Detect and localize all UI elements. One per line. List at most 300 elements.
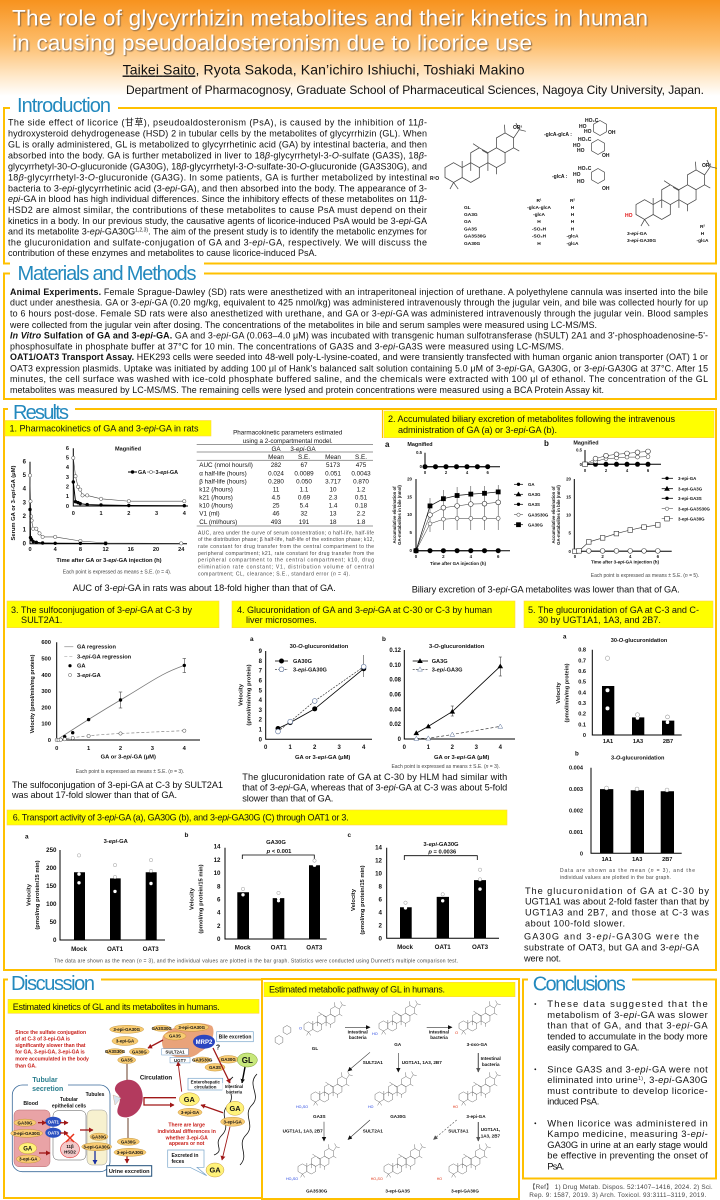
- finding text: [523, 886, 709, 963]
- structures: third row: HO₃SO: [286, 1177, 298, 1181]
- introduction text: hydroxysteroid dehydrogenease (HSD) 2 in tubular cells by the metabolites of glycyrrhizin (GL). When: [8, 129, 427, 139]
- chart legend: GA: [138, 470, 146, 476]
- diagram: GL, intestine and enterohepatic loop: GA30G: [221, 1057, 236, 1062]
- introduction text: [8, 116, 427, 258]
- chart b: 3-epi-GA biliary excretion: Accumulative elimination of: [551, 486, 556, 544]
- methods text: OAT3 expression plasmids. Uptake was initiated by adding 100 μl of Hank’s balanced salt solution containing 5.0 μM of 3-epi-GA, GA30G, or 3-epi-GA30G at 37°C. After 15: [10, 363, 708, 373]
- diagram: urine excretion: [107, 1118, 152, 1176]
- diagram: tubular secretion inset: HSD2: [64, 1149, 76, 1154]
- affiliation: Department of Pharmacognosy, Graduate School of Pharmaceutical Sciences, Nagoya City University, Japan.: [126, 83, 704, 97]
- title: [12, 6, 648, 56]
- introduction text: contribution of these enzymes and metabolites to cause licorice-induced PsA.: [8, 248, 317, 258]
- pathway arrows and enzyme labels: UGT1A1, 1A3, 2B7: [283, 1128, 323, 1134]
- bar chart a: 30-O-glucuronidation: a: [563, 634, 567, 640]
- panel 4 heading: [232, 601, 515, 628]
- diagram: metabolites above kidney: GA30G: [132, 1049, 147, 1054]
- structures: first row: HO: [372, 1032, 378, 1036]
- chemical structures of GL and metabolites: R²: [570, 198, 575, 204]
- panel 1 heading: [5, 420, 211, 436]
- chart a: GA biliary excretion: 0: [410, 548, 413, 553]
- chart b legend: [662, 476, 711, 521]
- chart b: 3-epi-GA biliary excretion: 0: [584, 468, 587, 473]
- line chart: serum concentration: 5: [23, 473, 27, 479]
- finding text: AUC of 3-epi-GA in rats was about 18-fold higher than that of GA.: [73, 583, 336, 593]
- bar chart a: 3-epi-GA: 250: [46, 847, 57, 854]
- chemical structures of GL and metabolites: HO: [577, 179, 585, 185]
- methods text: OAT1/OAT3 Transport Assay. HEK293 cells were seeded into 48-well poly-L-lysine-coated, and were transiently transfected with human organic anion transporter (OAT) 1 or: [10, 352, 708, 362]
- pharmacokinetic parameter table: 1.2: [357, 486, 366, 494]
- diagram: GL, intestine and enterohepatic loop: 3-epi-GA: [224, 1119, 243, 1124]
- methods text: metabolites was measured by LC-MS/MS. The remaining cells were lysed and protein concentrations were measured using a BCA Protein Assay kit.: [10, 385, 604, 395]
- chemical structures of GL and metabolites: OH: [608, 130, 616, 136]
- panel 1 heading: 1. Pharmacokinetics of GA and 3-epi-GA in rats: [10, 424, 199, 434]
- panel 4: glucuronidation by HLM: [232, 601, 515, 804]
- diagram: liver: [148, 1023, 220, 1063]
- line chart: serum concentration: 0: [23, 542, 27, 548]
- chart a: GA biliary excretion: 15: [407, 494, 413, 499]
- pharmacokinetic parameter table: Mean: [325, 454, 341, 461]
- statistics note: The data are shown as the mean (n = 3), and the individual values are plotted in the bar graph. Statistics were conducted using Dunnett's multiple comparison test.: [54, 958, 458, 964]
- chemical structures of GL and metabolites: R¹: [536, 198, 542, 204]
- diagram: tubular secretion inset: [11, 1074, 112, 1172]
- bar chart a: 3-epi-GA: a: [25, 834, 29, 840]
- pharmacokinetic parameter table: 475: [356, 462, 367, 469]
- pathway arrows and enzyme labels: UGT1A1, 1A3, 2B7: [402, 1060, 442, 1065]
- references: [529, 1184, 713, 1199]
- pharmacokinetic parameter table: 0.050: [296, 478, 312, 486]
- bar chart a: 3-epi-GA: 0: [53, 937, 57, 944]
- chemical structures of GL and metabolites: H: [571, 212, 575, 218]
- structures: second row: HO: [453, 1105, 458, 1109]
- bar chart a: 30-O-glucuronidation: 30-O-glucuronidation: [611, 638, 668, 644]
- pharmacokinetic parameter table: 25: [272, 502, 280, 510]
- conclusion bullet 2: epi-GA30G: [658, 1074, 708, 1085]
- chemical structures of GL and metabolites: OH: [602, 153, 610, 159]
- chart b: 3-O-glucuronidation: [382, 636, 515, 761]
- explanatory red text: more accumulated in the body: [15, 1057, 89, 1063]
- bar chart b: 3-O-glucuronidation: 2B7: [662, 857, 672, 863]
- chart legend: 3-epi-GA: [156, 470, 178, 476]
- callout: excreted in feces: feces: [172, 1159, 185, 1165]
- chemical structures of GL and metabolites: HO: [584, 129, 592, 135]
- pathway arrows and enzyme labels: SULT3A1: [448, 1128, 469, 1134]
- inset chart: magnified: 3: [66, 475, 69, 481]
- chart b: 3-epi-GA biliary excretion: [544, 439, 711, 564]
- bar chart b: GA30G: 6: [217, 896, 221, 904]
- line chart: sulfoconjugation velocity: 2: [119, 746, 122, 752]
- bar chart a: 30-O-glucuronidation: 0: [583, 733, 586, 739]
- chart b: 3-epi-GA biliary excretion: GA-metabolites in bile (nmol): [556, 485, 561, 545]
- chemical structures of GL and metabolites: GA3S: [464, 226, 478, 232]
- inset chart: magnified: 4: [183, 511, 187, 517]
- pharmacokinetic parameter table: CL (ml/hours): [199, 519, 237, 526]
- introduction text: 18β-glycyrrhetyl-3-O-glucuronide (GA3G). In some patients, GA is further metabolized by intestinal: [8, 172, 427, 182]
- line chart: sulfoconjugation velocity: 500: [41, 656, 51, 662]
- bar chart a: 30-O-glucuronidation: 2B7: [663, 739, 673, 745]
- line chart: serum concentration: 16: [128, 547, 134, 553]
- chart a legend: [275, 659, 327, 673]
- chart b legend: GA3G: [432, 659, 448, 665]
- bar chart c: 3-epi-GA30G: 3-epi-GA30G: [423, 842, 459, 848]
- introduction text: GL is orally administered, GL is metabolized to glycyrrhetinic acid (GA) by intestinal bacteria, and then: [8, 140, 427, 150]
- chart a: 30-O-glucuronidation: 6: [259, 678, 263, 684]
- chart a: GA biliary excretion: 6: [487, 470, 490, 475]
- line chart: serum concentration: [11, 460, 187, 564]
- pharmacokinetic parameter table: 11: [273, 486, 280, 494]
- chemical structures of GL and metabolites: H: [537, 219, 541, 225]
- chart b: 3-O-glucuronidation: 0: [398, 737, 402, 743]
- line chart: sulfoconjugation velocity: [30, 640, 200, 761]
- conclusion bullet 1: tended to accumulate in the body more: [547, 1031, 708, 1042]
- pharmacokinetic parameter table: 2.2: [357, 510, 366, 518]
- conclusion bullet 1: easily compared to GA.: [547, 1041, 639, 1052]
- introduction text: and its metabolite 3-epi-GA30G: [8, 227, 135, 237]
- bar chart a: 3-epi-GA: Velocity: [27, 883, 33, 906]
- bar chart c: 3-epi-GA30G: 2: [379, 922, 383, 929]
- table footnote: elimination rate constant; V1, distribution volume of central: [198, 565, 374, 571]
- panel: metabolic pathway: [262, 979, 519, 1199]
- structures: first row: 3-oxo-GA: [467, 1042, 488, 1047]
- diagram: tubular secretion inset: Tubular: [32, 1077, 58, 1084]
- table footnote: [198, 530, 374, 577]
- diagram: tubular secretion inset: Tubular: [60, 1097, 78, 1103]
- chemical structures of GL and metabolites: [430, 118, 717, 247]
- bar chart b: GA30G: (pmol/mg protein/15 min): [198, 864, 204, 934]
- bar chart a: 30-O-glucuronidation: 0.4: [578, 690, 587, 696]
- diagram: tubular secretion inset: epithelial cells: [52, 1104, 86, 1110]
- finding text: [242, 772, 507, 804]
- pharmacokinetic parameter table: 0.0043: [351, 470, 371, 477]
- chart legend: GA regression: [77, 645, 117, 651]
- pharmacokinetic parameter table: 10: [329, 486, 337, 494]
- bar chart b: 3-O-glucuronidation: 0: [580, 851, 583, 857]
- bar chart a: 30-O-glucuronidation: (pmol/min/mg protein): [564, 663, 570, 723]
- pathway subheading: Estimated metabolic pathway of GL in humans.: [269, 984, 445, 994]
- conclusion bullet 2: must contribute to develop licorice-: [547, 1085, 708, 1096]
- title: in causing pseudoaldosteronism due to licorice use: [12, 30, 532, 56]
- methods text: were collected from the jugular vein after dosing. The concentrations of the metabolites in bile and serum samples were measured using LC-MS/MS.: [9, 320, 597, 330]
- chemical structures of GL and metabolites: H: [571, 205, 575, 211]
- bar chart c: 3-epi-GA30G: c: [348, 832, 352, 839]
- bar chart a: 30-O-glucuronidation: 1A1: [603, 739, 613, 745]
- pharmacokinetic parameter table: 1.4: [329, 502, 338, 510]
- bar chart a: 3-epi-GA: 200: [46, 865, 57, 872]
- heading: discussion: Discussion: [11, 973, 95, 995]
- chart a legend: GA3S30G: [528, 512, 549, 518]
- pharmacokinetic parameter table: 5173: [326, 462, 340, 469]
- bar chart a: 30-O-glucuronidation: 1A3: [633, 739, 643, 745]
- label: circulation: Circulation: [140, 1074, 172, 1082]
- chemical structures of GL and metabolites: HO: [573, 143, 581, 149]
- chart a: GA biliary excretion: Time after GA injection (h): [430, 561, 486, 566]
- bar chart a: 3-epi-GA: (pmol/mg protein/15 min): [35, 860, 41, 930]
- diagram: tubular secretion inset: OAT1: [48, 1119, 60, 1124]
- inset chart: magnified: 1: [99, 511, 103, 517]
- bar chart b: GA30G: 12: [214, 857, 221, 864]
- diagram: tubular secretion inset: Blood: [23, 1101, 38, 1107]
- bar chart a: 3-epi-GA: OAT1: [107, 946, 124, 953]
- explanatory red text: for GA, 3-epi-GA, 3-epi-GA is: [15, 1050, 85, 1056]
- conclusion bullet 3: GA30G in urine at an early stage would: [547, 1139, 708, 1150]
- panel 3 heading: 3. The sulfoconjugation of 3-epi-GA at C-3 by: [11, 605, 192, 615]
- title: The role of glycyrrhizin metabolites and their kinetics in human: [12, 6, 648, 30]
- chart legend: GA: [77, 664, 86, 670]
- chart a: GA biliary excretion: [385, 440, 549, 566]
- diagram: liver: 3-epi-GA30G: [178, 1025, 206, 1030]
- diagram: liver: SULT2A1: [165, 1050, 185, 1055]
- finding text: substrate of OAT3, but GA and 3-epi-GA: [524, 943, 700, 953]
- diagram: metabolites above kidney: GA3S: [121, 1058, 133, 1063]
- pathway arrows and enzyme labels: SULT2A1: [363, 1128, 383, 1134]
- individual differences red text: There are large: [168, 1123, 205, 1129]
- chemical structures of GL and metabolites: -glcA: [566, 234, 579, 240]
- chart a: 30-O-glucuronidation: 0: [264, 745, 268, 751]
- pathway arrows and enzyme labels: Intestinal: [481, 1056, 501, 1061]
- line chart: serum concentration: 12: [102, 547, 109, 553]
- chart a: GA biliary excretion: 0: [420, 464, 423, 469]
- inset chart: magnified: 0: [66, 504, 69, 510]
- bar chart a: 30-O-glucuronidation: Velocity: [556, 682, 562, 704]
- bar chart c: 3-epi-GA30G: Velocity: [351, 888, 357, 911]
- conclusion bullet 2: [534, 1063, 708, 1107]
- chart a: 30-O-glucuronidation: 2: [313, 745, 317, 751]
- bar chart a: 3-epi-GA: Mock: [71, 946, 87, 953]
- bar chart a: 3-epi-GA: 3-epi-GA: [104, 839, 129, 845]
- chart b: 3-epi-GA biliary excretion: 2: [601, 554, 604, 559]
- chart legend: 3-epi-GA regression: [77, 654, 132, 660]
- chart b: 3-epi-GA biliary excretion: 20: [566, 476, 572, 482]
- individual differences red text: individual differences in: [158, 1129, 216, 1135]
- inset chart: magnified: 6: [66, 446, 69, 452]
- chart a: GA biliary excretion: 2: [445, 470, 448, 475]
- references: 【Ref】 1) Drug Metab. Dispos. 52:1407–1416, 2024. 2) Sci.: [529, 1184, 713, 1191]
- pharmacokinetic parameter table: 3-epi-GA: [290, 446, 316, 453]
- panel: conclusions: [523, 974, 716, 1178]
- diagram: metabolites above kidney: GA3S30G: [105, 1049, 126, 1054]
- finding text: was about 17-fold slower than that of GA.: [11, 790, 177, 800]
- data note: individual values are plotted in the bar graph.: [560, 875, 671, 881]
- kinetics subheading: Estimated kinetics of GL and its metabolites in humans.: [13, 1002, 220, 1012]
- line chart: serum concentration: Serum GA or 3-epi-GA (μM): [11, 465, 17, 540]
- chart a legend: GA3G: [528, 492, 541, 497]
- table footnote: of the distribution phase; β half-life, half-life of the extinction phase; k12,: [198, 537, 374, 543]
- bar chart c: 3-epi-GA30G: 0: [379, 935, 383, 942]
- pathway arrows and enzyme labels: bacteria: [349, 1035, 367, 1040]
- structures: first row: GL: [312, 1046, 318, 1051]
- chemical structures of GL and metabolites: -glcA: [533, 212, 546, 218]
- bar chart b: GA30G: 2: [217, 923, 221, 930]
- chart b: 3-epi-GA biliary excretion: b: [544, 439, 549, 448]
- chart b: 3-epi-GA biliary excretion: Magnified: [573, 440, 599, 446]
- diagram: metabolites above kidney: 3-epi-GA30G: [113, 1027, 141, 1032]
- chemical structures of GL and metabolites: -SO₃H: [532, 226, 547, 232]
- line chart: sulfoconjugation velocity: 200: [41, 705, 51, 711]
- methods text: In Vitro Sulfation of GA and 3-epi-GA. GA and 3-epi-GA (0.063–4.0 μM) was incubated with transgenic human sulfotransferase (hSULT) 2A1 and 3'-phosphoadenosine-5'-: [10, 331, 708, 341]
- line chart: sulfoconjugation velocity: 0: [48, 738, 51, 744]
- diagram: liver: ?: [216, 1044, 220, 1052]
- chart a: 30-O-glucuronidation: GA or 3-epi-GA (μM): [295, 755, 350, 761]
- chart b legend: 3-epi-GA: [678, 476, 697, 481]
- pharmacokinetic parameter table: 67: [300, 462, 308, 469]
- line chart: sulfoconjugation velocity: 3: [151, 746, 155, 752]
- methods text: [9, 287, 709, 395]
- bar chart b: GA30G: 8: [217, 883, 221, 890]
- chart a: GA biliary excretion: 0.5: [416, 450, 423, 455]
- finding text: The glucuronidation rate of GA at C-30 by HLM had similar with: [242, 772, 507, 782]
- chart b: 3-epi-GA biliary excretion: 6: [657, 554, 660, 559]
- chart b: 3-O-glucuronidation: 0.02: [389, 722, 402, 728]
- chart b: 3-O-glucuronidation: 4: [499, 745, 503, 751]
- diagram: metabolites above kidney: [105, 1025, 149, 1080]
- pharmacokinetic parameter table: 282: [271, 462, 282, 469]
- inset chart: magnified: 0: [72, 511, 75, 517]
- pharmacokinetic parameter table: 0.870: [353, 478, 369, 486]
- diagram: GL, intestine and enterohepatic loop: 3-epi-GA: [181, 1110, 200, 1115]
- bar chart b: GA30G: OAT1: [271, 944, 287, 952]
- explanatory red text: of at C-3 of 3-epi-GA is: [15, 1036, 70, 1042]
- chart a: GA biliary excretion: GA-metabolites in bile (nmol): [397, 485, 402, 545]
- inset chart: magnified: 5: [66, 456, 69, 462]
- panel 6 heading: 6. Transport activity of 3-epi-GA (a), GA30G (b), and 3-epi-GA30G (C) through OAT1 or 3.: [13, 813, 349, 823]
- panel: results: [4, 402, 716, 970]
- chart b: 3-epi-GA biliary excretion: 10: [566, 513, 572, 518]
- chemical structures of GL and metabolites: HO: [625, 213, 633, 219]
- pathway subheading: [264, 982, 515, 997]
- conclusion bullet 3: [534, 1117, 708, 1172]
- line chart: sulfoconjugation velocity: 1: [87, 746, 91, 752]
- pharmacokinetic parameter table: k10 (/hours): [199, 502, 233, 510]
- line chart: sulfoconjugation velocity: 0: [55, 746, 58, 752]
- bar chart a: 3-epi-GA: 50: [50, 919, 57, 926]
- bar chart b: 3-O-glucuronidation: 0.001: [569, 830, 583, 836]
- chart b: 3-O-glucuronidation: 0.06: [389, 692, 402, 698]
- chart a: 30-O-glucuronidation: 2: [259, 718, 263, 724]
- pharmacokinetic parameter table: 5.4: [300, 502, 309, 510]
- bar chart a: 30-O-glucuronidation: 0.6: [578, 669, 586, 675]
- pharmacokinetic parameter table: Mean: [268, 454, 284, 461]
- bar chart a: 3-epi-GA: [25, 834, 165, 953]
- bar chart c: 3-epi-GA30G: 14: [375, 845, 383, 852]
- pharmacokinetic parameter table: GA: [271, 446, 281, 453]
- line chart: serum concentration: 4: [23, 487, 27, 493]
- diagram: GL, intestine and enterohepatic loop: GL: [242, 1056, 253, 1065]
- pharmacokinetic parameter table: V1 (ml): [199, 510, 220, 518]
- diagram: tubular secretion inset: 3-epi-GA: [19, 1157, 38, 1162]
- bar chart b: 3-O-glucuronidation: 1A3: [632, 857, 642, 863]
- diagram: tubular secretion inset: GA30G: [92, 1134, 107, 1139]
- chart a: GA biliary excretion: Accumulative elimination of: [392, 486, 397, 544]
- chart a: 30-O-glucuronidation: 9: [259, 649, 263, 655]
- chart a legend: GA3S: [528, 502, 540, 507]
- inset chart: magnified: 1: [66, 494, 69, 500]
- structures: second row: HO: [368, 1105, 374, 1109]
- bar chart c: 3-epi-GA30G: (pmol/mg protein/15 min): [360, 865, 366, 935]
- line chart: serum concentration: 24: [178, 547, 185, 553]
- diagram: tubular secretion inset: 3-epi-GA30G: [83, 1144, 111, 1149]
- panel 2 heading: [384, 411, 714, 438]
- structures: third row: HO₃SO: [371, 1177, 383, 1181]
- finding text: UGT1A3 and 2B7, and those at C-3 was: [525, 908, 709, 918]
- chart a legend: GA30G: [528, 522, 543, 528]
- explanatory red text: [15, 1030, 89, 1069]
- panel 2 heading: 2. Accumulated biliary excretion of metabolites following the intravenous: [388, 414, 675, 424]
- diagram: GL, intestine and enterohepatic loop: Enterohepatic: [191, 1079, 220, 1084]
- panel: materials and methods: [4, 262, 716, 399]
- bar chart a: 3-epi-GA: OAT3: [143, 946, 159, 953]
- table footnote: peripheral compartment to the central compartment; k10, drug: [198, 558, 374, 564]
- callout: excreted in feces: GA: [209, 1166, 221, 1175]
- chemical structures of GL and metabolites: 3-epi-GA30G: [627, 238, 656, 244]
- diagram: urine excretion: GA30G: [121, 1139, 136, 1144]
- chart b: 3-epi-GA biliary excretion: 4: [626, 468, 629, 473]
- conclusion bullet 1: These data suggested that the: [547, 998, 708, 1009]
- conclusion bullet 1: [534, 998, 708, 1052]
- bar chart b: GA30G: p < 0.001: [266, 849, 292, 855]
- line chart: serum concentration: 2: [23, 514, 27, 520]
- structures: third row: HO: [437, 1177, 442, 1181]
- conclusion bullet 3: PsA.: [547, 1161, 564, 1172]
- chart a: 30-O-glucuronidation: 4: [259, 698, 263, 704]
- line chart: sulfoconjugation velocity: GA or 3-epi-GA (μM): [101, 755, 156, 761]
- line chart: sulfoconjugation velocity: Velocity (pmol/min/mg protein): [30, 654, 36, 733]
- pharmacokinetic parameter table: k12 (/hours): [199, 486, 233, 494]
- pharmacokinetic parameter table: 3.717: [325, 478, 341, 486]
- inset chart: magnified: Magnified: [115, 446, 142, 452]
- panel: introduction: [4, 95, 717, 264]
- chemical structures of GL and metabolites: HO: [579, 124, 587, 130]
- chart b: 3-O-glucuronidation: 2: [451, 745, 455, 751]
- note: error expression: Each point is expressed as means ± S.E. (n = 3).: [391, 764, 500, 770]
- header background gradient: [0, 0, 720, 96]
- bar chart a: 30-O-glucuronidation: 0.3: [578, 701, 586, 707]
- chart a: 30-O-glucuronidation: (pmol/min/mg protein): [247, 664, 253, 726]
- line chart: serum concentration: 8: [79, 547, 82, 553]
- chart b: 3-epi-GA biliary excretion: 4: [629, 554, 632, 559]
- panel: discussion: [4, 973, 262, 1198]
- authors: Taikei Saito, Ryota Sakoda, Kan’ichiro Ishiuchi, Toshiaki Makino: [123, 62, 525, 78]
- bar chart b: GA30G: 10: [214, 870, 221, 877]
- introduction text: 1,2,3): [135, 228, 148, 234]
- bar chart a: 3-epi-GA: 150: [46, 883, 57, 890]
- data note: [560, 868, 695, 881]
- kinetics subheading: [8, 999, 259, 1013]
- line chart: sulfoconjugation velocity: 400: [41, 673, 51, 679]
- inset chart: magnified: 3: [155, 511, 158, 517]
- chart a: 30-O-glucuronidation: 8: [259, 659, 263, 665]
- structures: second row: [296, 1071, 501, 1119]
- pharmacokinetic parameter table: S.E.: [355, 454, 367, 461]
- individual differences red text: appears or not: [169, 1141, 205, 1147]
- finding text: [11, 780, 223, 800]
- chart b: 3-O-glucuronidation: 0.08: [389, 678, 402, 684]
- chart b legend: 3-epi-GA3S: [678, 496, 702, 501]
- chart a legend: [514, 482, 549, 528]
- bar chart a: 30-O-glucuronidation: 0.7: [578, 658, 586, 664]
- diagram: liver: UGT?: [174, 1058, 186, 1063]
- line chart: serum concentration: 20: [153, 547, 159, 553]
- chemical structures of GL and metabolites: GA3S30G: [464, 234, 486, 240]
- chart a: 30-O-glucuronidation: 3: [338, 745, 342, 751]
- chart a: GA biliary excretion: 0: [424, 470, 427, 475]
- diagram: urine excretion: Urine excretion: [109, 1169, 150, 1175]
- bar chart b: 3-O-glucuronidation: 0.004: [569, 766, 584, 772]
- pharmacokinetic parameter table: 32: [300, 510, 308, 518]
- chart legend: [64, 645, 132, 679]
- finding text: about 100-fold slower.: [525, 918, 625, 928]
- chemical structures of GL and metabolites: OH: [602, 186, 610, 192]
- chemical structures of GL and metabolites: GA: [464, 219, 472, 225]
- diagram: GL, intestine and enterohepatic loop: GA3S: [209, 1065, 221, 1070]
